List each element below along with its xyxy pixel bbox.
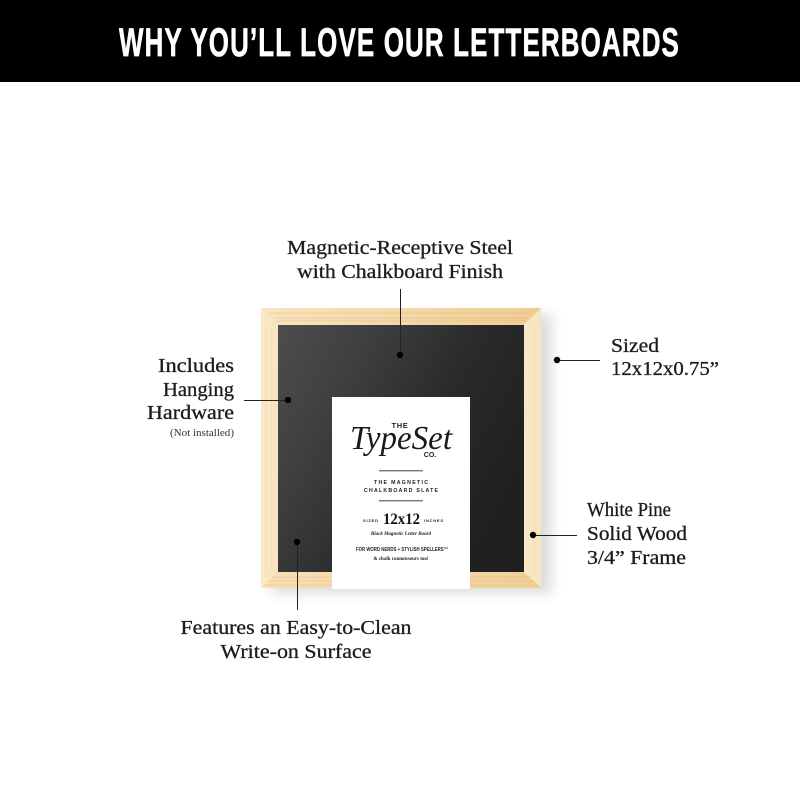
card size [363,511,443,528]
callout: white pine frame [530,500,687,569]
callout: magnetic-receptive steel [287,238,514,358]
callout: magnetic-receptive steel: Magnetic-Receptive Steel [287,238,514,259]
wood frame [261,308,541,588]
callout: write-on surface: Write-on Surface [220,642,372,663]
callout: magnetic-receptive steel: with Chalkboard Finish [297,262,503,283]
header banner [0,0,800,82]
callout: hanging hardware: Includes [158,356,234,377]
card logo: THE [392,421,408,430]
callout: sized: 12x12x0.75” [611,359,719,380]
callout: white pine frame: Solid Wood [587,524,687,545]
card tagline: FOR WORD NERDS + STYLISH SPELLERS™ [356,547,448,553]
card size: 12x12 [383,511,420,528]
card logo: TypeSet [350,420,454,457]
callout: hanging hardware: (Not installed) [170,428,234,439]
callout: white pine frame: White Pine [587,500,671,521]
product card: & chalk connoisseurs too! [373,557,429,562]
callout: hanging hardware: Hanging [163,380,234,401]
callout: white pine frame: 3/4” Frame [587,548,686,569]
callout: sized [554,336,719,380]
callout: hanging hardware: Hardware [147,403,234,424]
card logo: CO. [424,452,436,459]
card size: INCHES [424,518,443,523]
card subtitle: THE MAGNETIC [374,480,428,486]
letterboard product photo [261,308,552,594]
chalkboard surface [278,325,524,572]
callout: write-on surface [180,539,412,663]
callout: write-on surface: Features an Easy-to-Clean [180,618,412,639]
product card: CHALKBOARD SLATE [364,488,439,494]
callout: hanging hardware [147,356,291,439]
card description: Black Magnetic Letter Board [370,532,432,537]
card size: SIZED [363,518,378,523]
product card [332,397,470,589]
callout: sized: Sized [611,336,659,357]
